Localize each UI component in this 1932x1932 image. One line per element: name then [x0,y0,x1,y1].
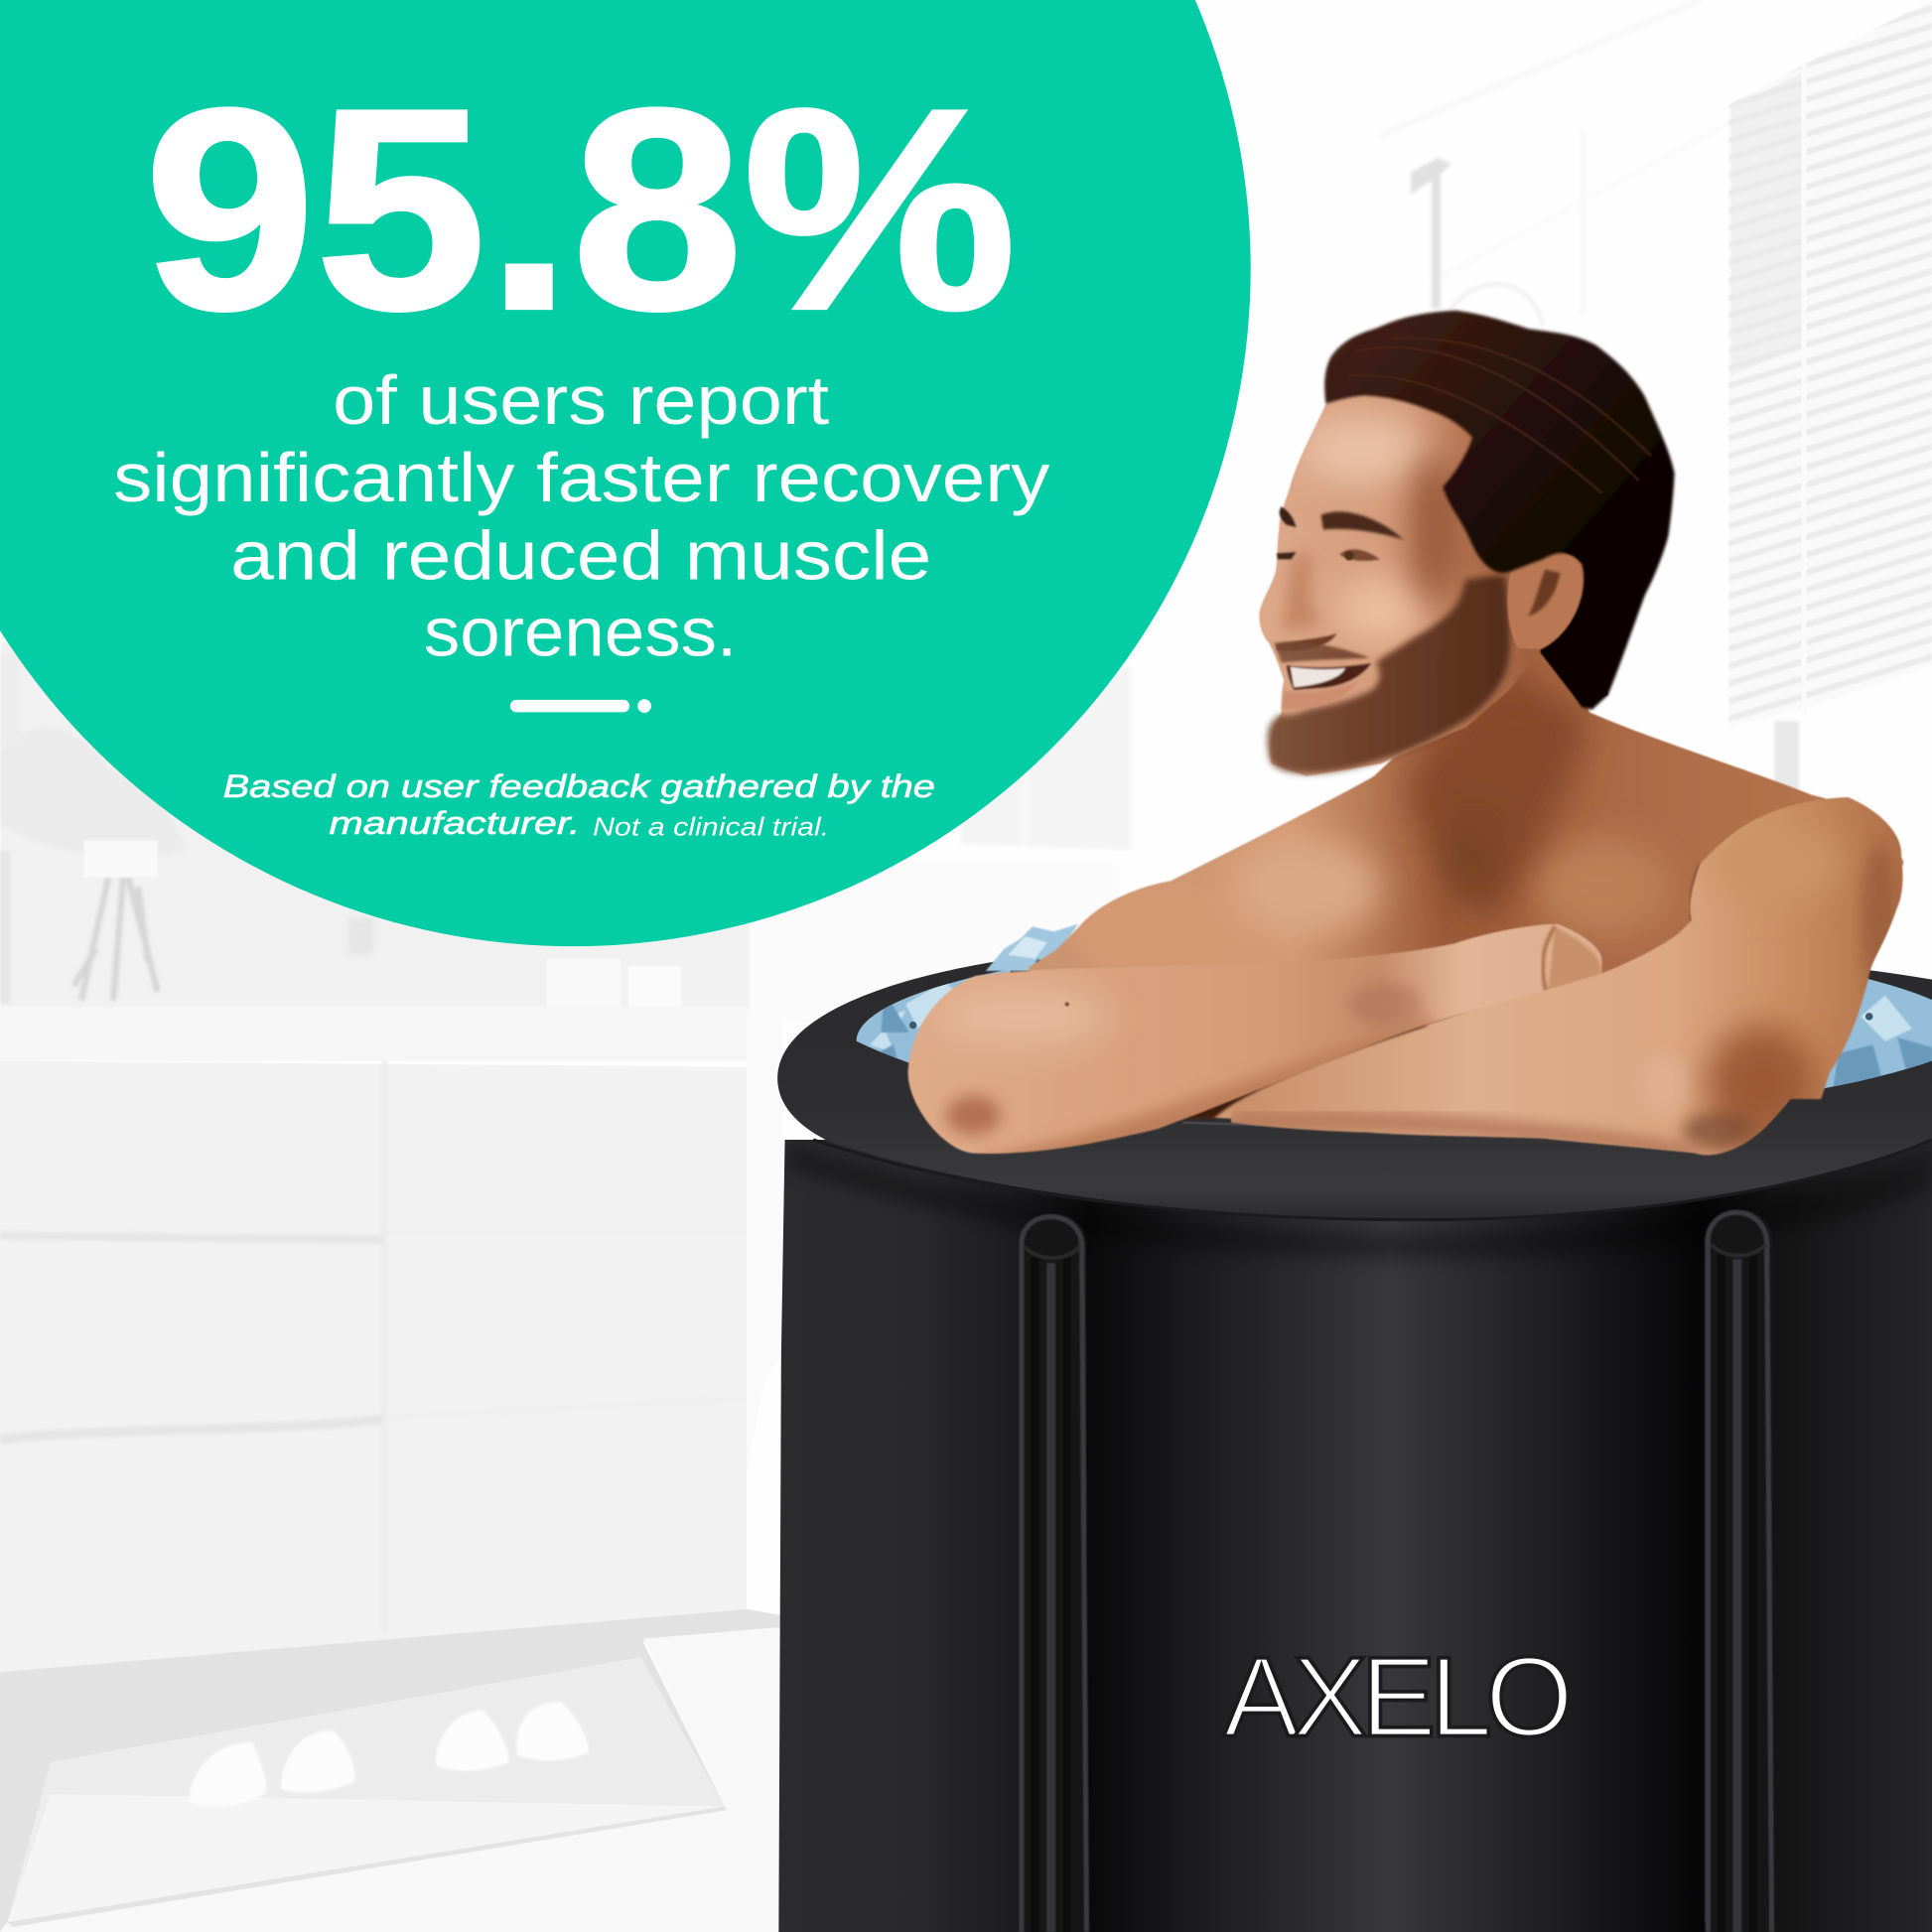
ear [1507,552,1584,649]
smile [1282,663,1371,709]
cabinet [0,1061,747,1672]
window blinds [1728,0,1932,727]
eyebrows [1320,511,1404,540]
wall hook [1411,158,1451,308]
face [1259,391,1540,776]
side gap beside cabinet [747,1011,783,1478]
rim inner opening [857,936,1932,1124]
big statistic: 95.8%: 95.8% [144,50,1017,369]
ice in tub [856,970,1932,1088]
ice mound above rim [986,924,1078,971]
right tube channel [1704,1210,1773,1932]
soft ceiling lines [1380,0,1701,136]
hair behind ear [1540,548,1614,707]
window frame base [1774,721,1799,794]
right arm and forearm [1231,797,1903,1156]
person: man resting on tub [908,311,1932,1176]
torso [1029,648,1904,1120]
body statement [113,361,1050,670]
body statement: and reduced muscle [230,516,931,594]
footnote: Based on user feedback gathered by the [223,768,935,804]
counter top [0,1007,747,1061]
round wall fixture [1442,284,1543,327]
body statement: significantly faster recovery [113,439,1050,516]
bath mat [7,1657,725,1922]
panel: green stat circle [0,0,1251,946]
plant on counter [0,653,185,1004]
body statement: of users report [333,361,829,439]
toe kick [0,1609,788,1932]
back wall behind counter [0,0,1799,1023]
eyes [1339,549,1380,561]
hair [1324,311,1675,710]
tub body [778,1140,1932,1932]
front rim lip highlight [1182,1123,1601,1140]
divider dash and dot [510,699,651,713]
left forearm and hand [908,924,1601,1154]
product: black ice tub [777,924,1932,1932]
counter items [547,959,621,1021]
left tube channel [1018,1213,1087,1932]
slippers [189,1702,589,1807]
shadow between forearms [1182,1023,1430,1119]
brand logo: AXELO [1223,1635,1574,1761]
nose shadow [1277,633,1337,651]
tub rim [777,942,1932,1220]
footnote [223,768,935,841]
wall recess [961,665,1131,850]
floor [0,1626,788,1932]
beard [1268,576,1510,773]
footnote: Not a clinical trial. [593,811,829,841]
body statement: soreness. [424,593,737,670]
footnote: manufacturer. [329,805,581,841]
